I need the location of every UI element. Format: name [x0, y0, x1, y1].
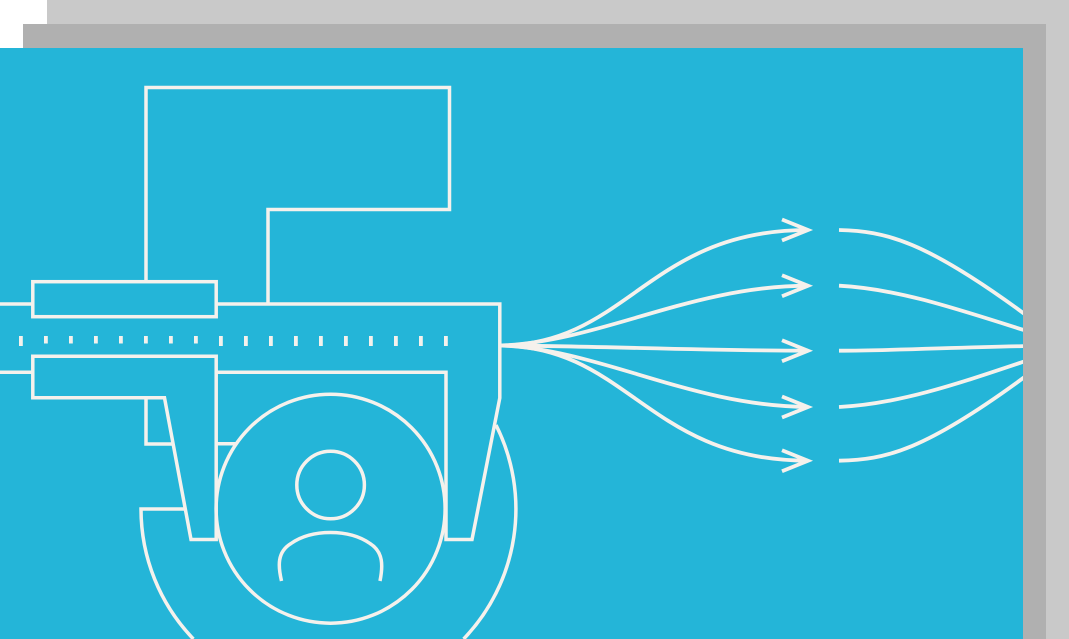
person badge circle [216, 394, 445, 623]
fan of arrows [500, 220, 808, 471]
caliper main beam and fixed jaw [0, 304, 500, 540]
upper slider [33, 282, 216, 317]
caliper upper jaw [146, 88, 450, 304]
scale ticks [19, 336, 448, 346]
lower slider and moving jaw [33, 356, 216, 540]
icon: person [279, 451, 382, 581]
outer dial arc [141, 425, 516, 639]
small bracket [146, 398, 236, 444]
converging lines clipped by panel edge [839, 230, 1030, 461]
